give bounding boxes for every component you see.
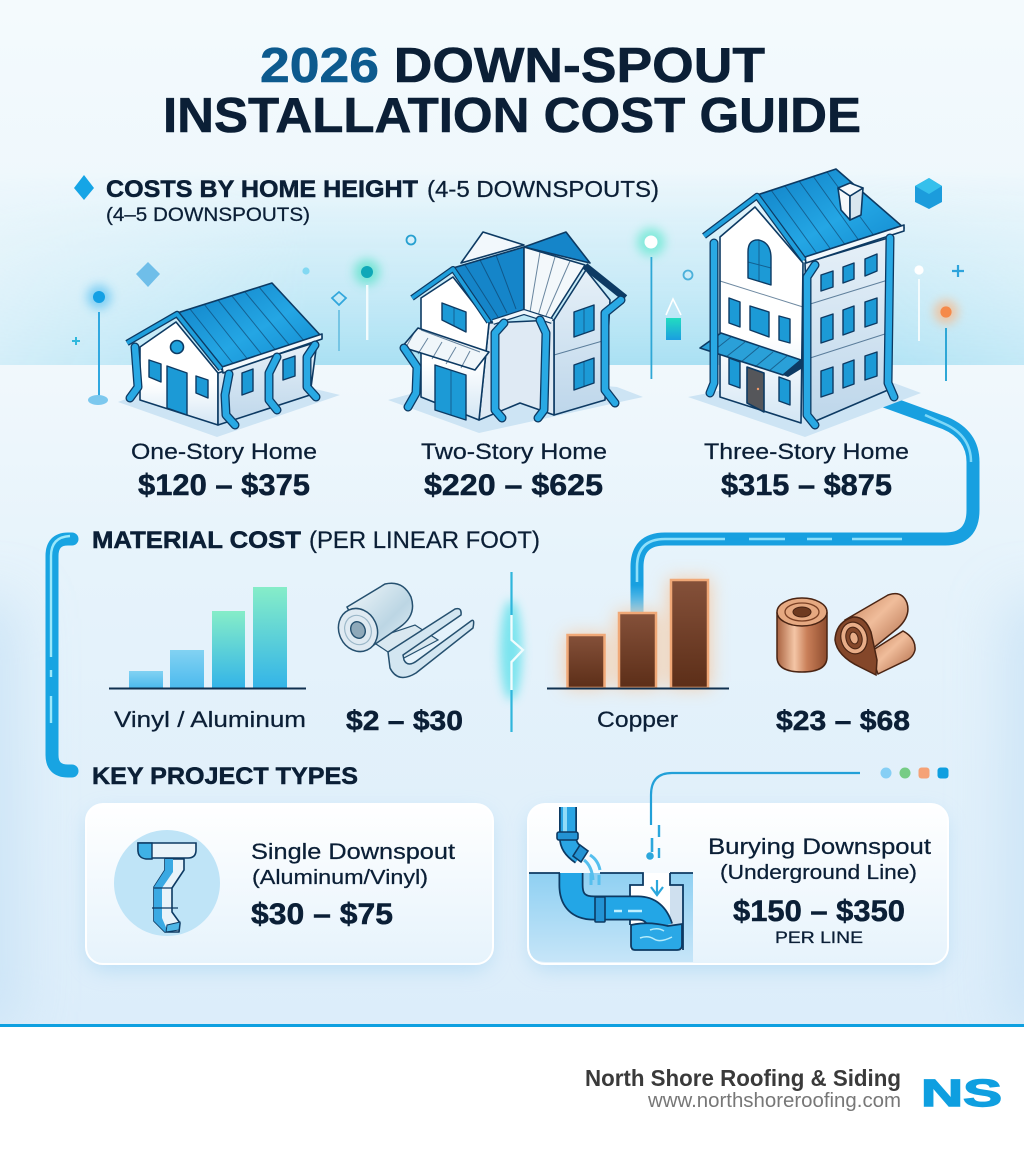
text: burying downspout: [708, 834, 931, 947]
heading: material cost: [92, 527, 540, 554]
icon: copper coils: [777, 594, 915, 675]
icon: downspout in circle: [114, 830, 220, 936]
decorative pole and sparkle icons: [72, 178, 964, 405]
label: three-story home price: $315 – $875: [721, 469, 892, 502]
price: vinyl / aluminum: $2 – $30: [346, 705, 463, 736]
price: copper: $23 – $68: [776, 705, 910, 736]
heading: costs by home height: (4-5 DOWNSPOUTS): [427, 176, 659, 202]
pipe connector from three-story home to copper chart: [630, 398, 973, 612]
label: vinyl / aluminum: Vinyl / Aluminum: [114, 707, 306, 732]
label: one-story home price: One-Story Home: [131, 439, 317, 464]
title: 2026 DOWN-SPOUT: [260, 39, 765, 93]
heading: key project types: KEY PROJECT TYPES: [92, 763, 358, 790]
heading: costs by home height: COSTS BY HOME HEIGHT: [106, 176, 418, 203]
label: two-story home price: $220 – $625: [424, 469, 603, 502]
text: single downspout: (Aluminum/Vinyl): [252, 867, 428, 889]
footer company name and url: www.northshoreroofing.com: [647, 1090, 901, 1112]
illustration: underground drain line: [529, 807, 693, 962]
footer company name and url: [585, 1065, 901, 1112]
title: [163, 39, 861, 143]
text: burying downspout: PER LINE: [775, 928, 863, 947]
left bracket pipe: [51, 536, 72, 771]
logo: NS: NS: [921, 1073, 1002, 1115]
text: burying downspout: Burying Downspout: [708, 834, 931, 859]
panel: single downspout: [86, 804, 493, 970]
bar chart: vinyl / aluminum: [109, 587, 306, 690]
label: two-story home price: Two-Story Home: [421, 439, 607, 464]
label: copper: Copper: [597, 707, 678, 732]
label: one-story home price: [131, 439, 317, 502]
icon: two-story house: [388, 232, 643, 433]
icon: aluminum coil and gutter: [331, 583, 474, 677]
heading: costs by home height: (4–5 DOWNSPOUTS): [106, 205, 310, 226]
text: single downspout: [251, 839, 455, 931]
text: burying downspout: $150 – $350: [733, 895, 905, 928]
title: INSTALLATION COST GUIDE: [163, 89, 861, 143]
text: single downspout: $30 – $75: [251, 898, 393, 931]
text: single downspout: Single Downspout: [251, 839, 455, 864]
bar chart: copper: [547, 579, 729, 690]
panel: burying downspout: [528, 804, 948, 970]
divider with chevron: [500, 572, 523, 732]
text: burying downspout: (Underground Line): [720, 862, 917, 884]
heading: material cost: MATERIAL COST: [92, 527, 301, 554]
footer company name and url: North Shore Roofing & Siding: [585, 1065, 901, 1091]
label: three-story home price: Three-Story Home: [704, 439, 909, 464]
connector line and status dots: [651, 768, 948, 825]
icon: one-story house: [118, 283, 340, 437]
heading: costs by home height: [74, 175, 659, 226]
label: two-story home price: [421, 439, 607, 502]
label: one-story home price: $120 – $375: [138, 469, 310, 502]
icon: three-story house: [688, 169, 921, 437]
label: three-story home price: [704, 439, 909, 502]
heading: material cost: (PER LINEAR FOOT): [309, 527, 540, 554]
footer: [0, 1024, 1024, 1154]
